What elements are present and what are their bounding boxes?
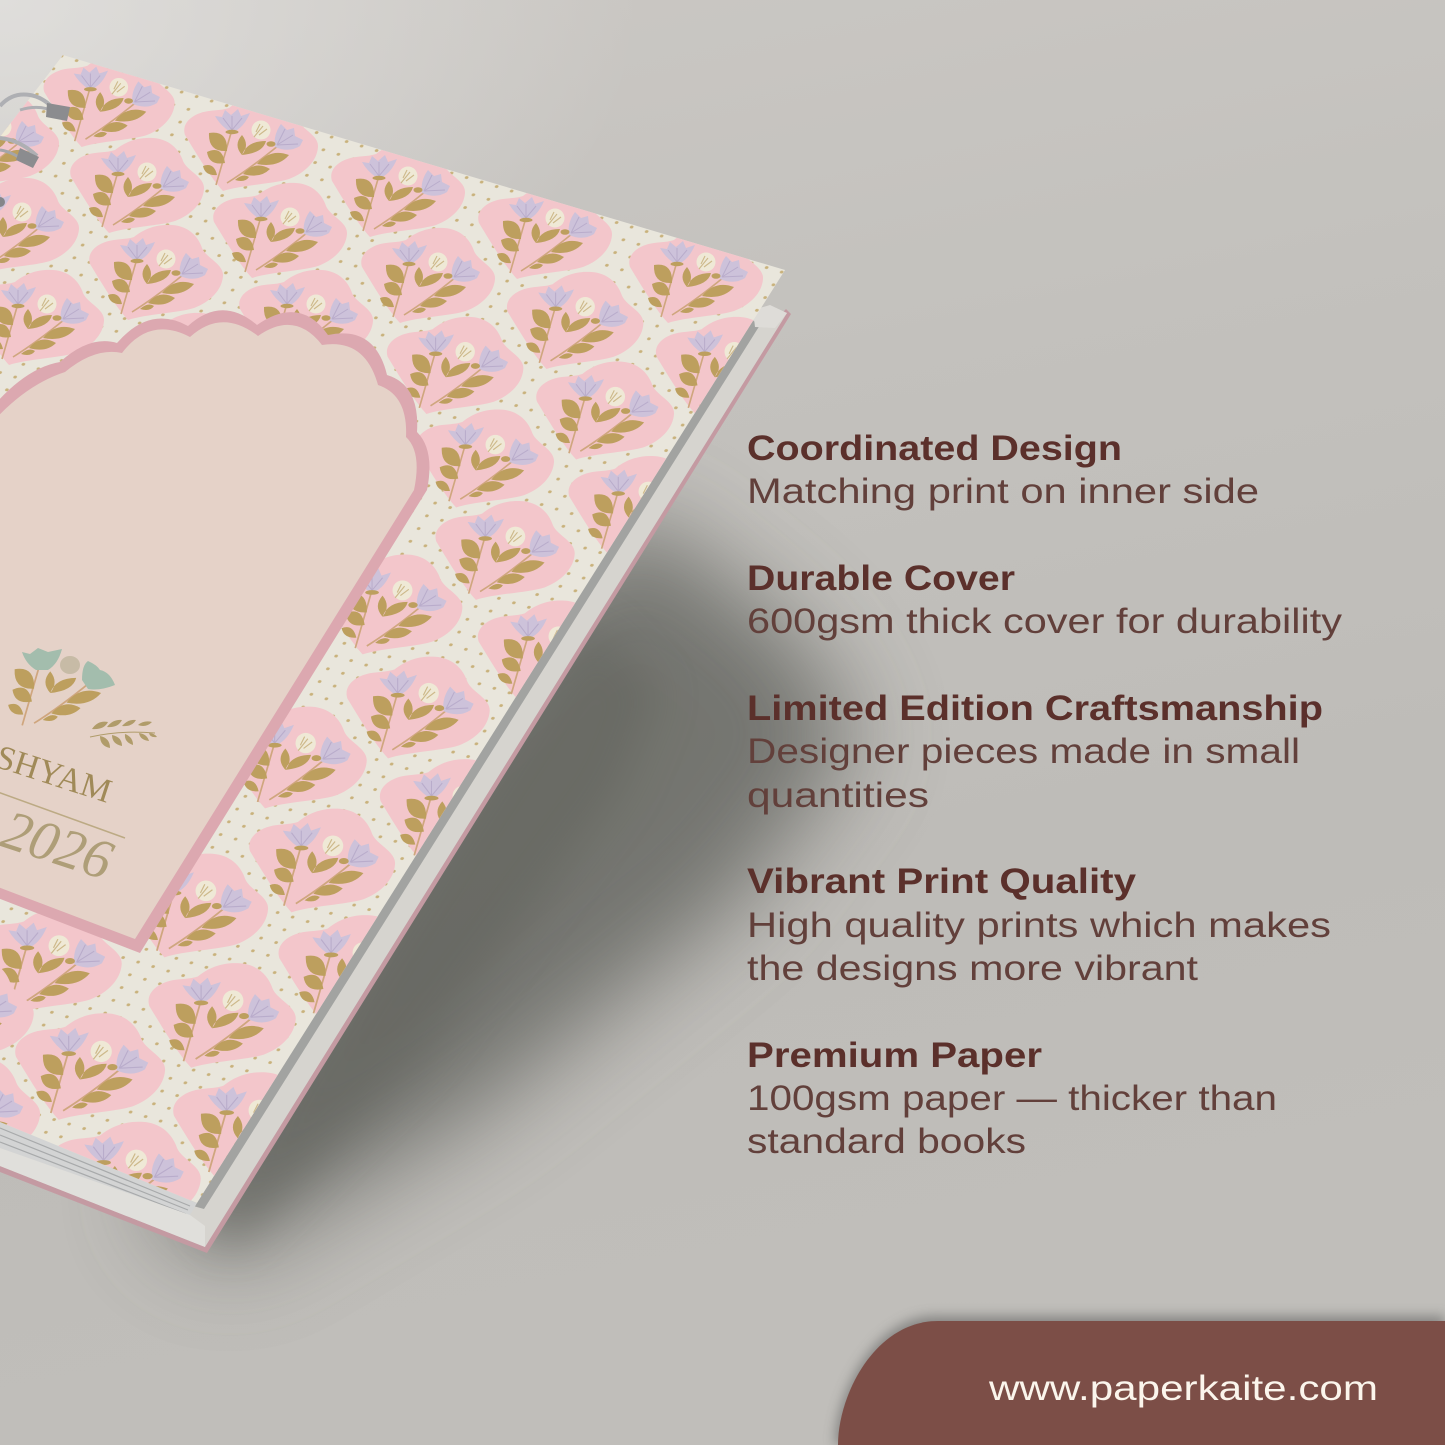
- feature list: [747, 429, 1343, 1161]
- arch label border: [0, 310, 429, 953]
- feature: limited edition craftsmanship: Limited Edition Craftsmanship: [747, 689, 1323, 728]
- feature: vibrant print quality: the designs more vibrant: [747, 949, 1198, 988]
- inner cover board: [0, 306, 787, 1247]
- feature: vibrant print quality: [747, 862, 1331, 988]
- feature: durable cover: 600gsm thick cover for durability: [747, 602, 1343, 641]
- feature: premium paper: standard books: [747, 1122, 1026, 1161]
- arch label panel: [0, 322, 417, 939]
- feature: coordinated design: Coordinated Design: [747, 429, 1122, 468]
- icon: leaf sprig: [90, 720, 157, 748]
- feature: premium paper: 100gsm paper — thicker than: [747, 1079, 1277, 1118]
- feature: premium paper: [747, 1036, 1277, 1161]
- cover page with scallop pattern: [0, 55, 785, 1203]
- feature: premium paper: Premium Paper: [747, 1036, 1042, 1075]
- feature: coordinated design: [747, 429, 1259, 511]
- cover corner tab: [753, 305, 787, 328]
- book shadow: [150, 510, 860, 1262]
- footer tab: [838, 1321, 1445, 1445]
- icon: teal flower bouquet: [8, 648, 115, 725]
- feature: durable cover: Durable Cover: [747, 559, 1015, 598]
- feature: limited edition craftsmanship: [747, 689, 1323, 815]
- feature: coordinated design: Matching print on inner side: [747, 472, 1259, 511]
- page block edge: [0, 1120, 205, 1247]
- cover pink outer edge: [0, 309, 791, 1253]
- divider line: [0, 791, 125, 838]
- notebook: [0, 0, 800, 1300]
- feature: limited edition craftsmanship: quantities: [747, 776, 929, 815]
- website url: www.paperkaite.com: [988, 1369, 1378, 1408]
- spiral binding rings: [0, 94, 70, 207]
- feature: durable cover: [747, 559, 1343, 641]
- cover gutter shadow band: [186, 315, 760, 1209]
- feature: limited edition craftsmanship: Designer pieces made in small: [747, 732, 1300, 771]
- footer shadow: [835, 1316, 1445, 1445]
- feature: vibrant print quality: Vibrant Print Quality: [747, 862, 1137, 901]
- feature: vibrant print quality: High quality prints which makes: [747, 906, 1331, 945]
